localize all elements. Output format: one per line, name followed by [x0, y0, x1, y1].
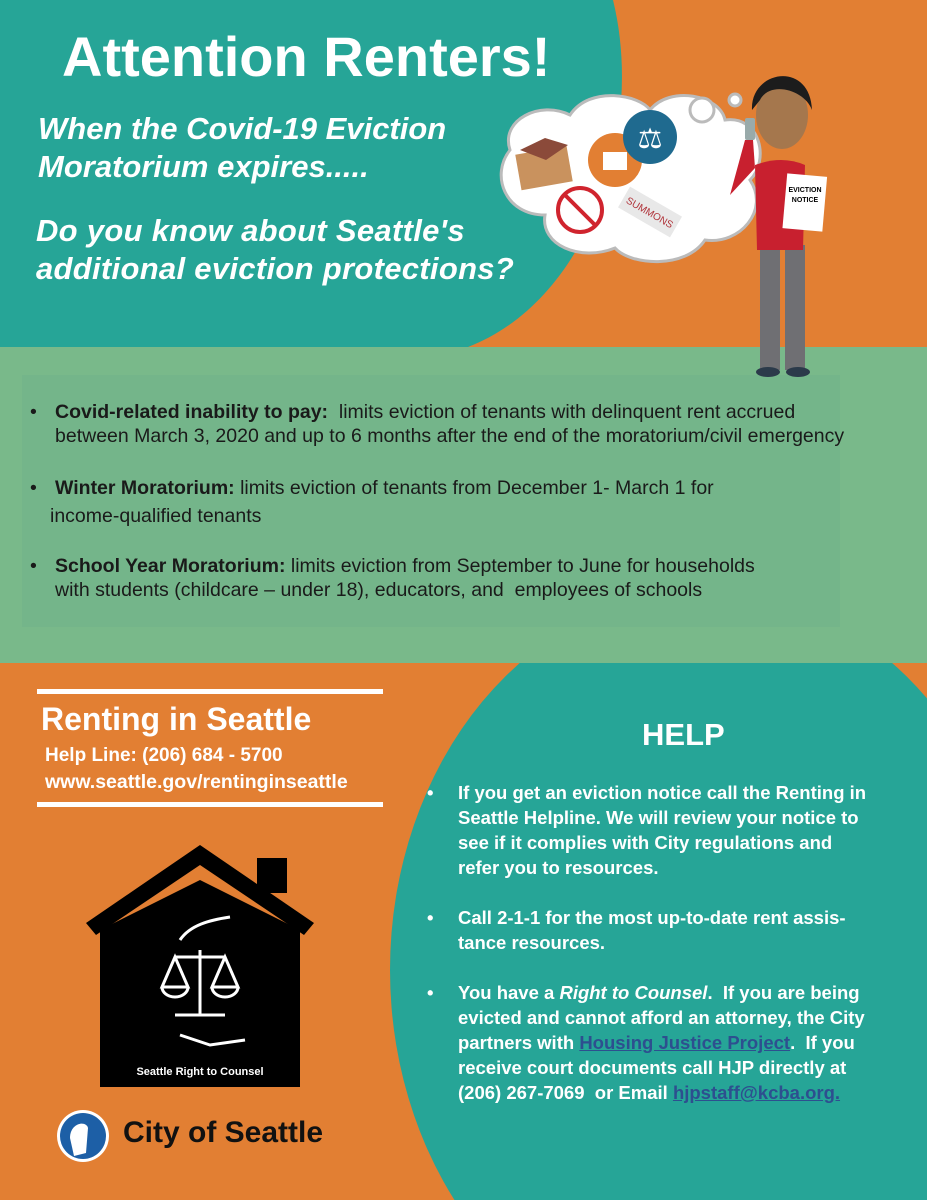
bullet 1: [30, 401, 844, 447]
subtitle: When the Covid-19 Eviction: [38, 111, 446, 146]
summons: [618, 187, 682, 237]
bullet 3: [30, 555, 755, 601]
envelope: [515, 146, 573, 190]
bullet 1: Covid-related inability to pay: limits eviction of tenants with delinquent rent accrued: [55, 401, 795, 423]
panel: Renting in Seattle: [37, 689, 383, 807]
thought bubble: SUMMONS: [624, 195, 675, 231]
illustration: thought bubble and person: [500, 76, 828, 377]
bullet 2: [30, 477, 714, 527]
bullet 1: •: [30, 401, 37, 423]
question: Do you know about Seattle's: [36, 213, 465, 248]
courthouse icon: [588, 133, 642, 187]
contact info: www.seattle.gov/rentinginseattle: [45, 771, 348, 793]
thought bubble: ⚖: [637, 123, 663, 154]
icon: Seattle Right to Counsel house: Seattle Right to Counsel: [136, 1066, 264, 1078]
person: EVICTION: [788, 187, 822, 194]
logo: City of Seattle: City of Seattle: [123, 1116, 323, 1149]
person: NOTICE: [792, 197, 819, 204]
person: [730, 76, 827, 377]
subtitle: [38, 111, 446, 184]
question: additional eviction protections?: [36, 251, 514, 286]
help bullet 3: •: [427, 982, 433, 1003]
scales icon: [623, 110, 677, 164]
bullet 3: •: [30, 555, 37, 577]
no sign: [558, 188, 602, 232]
bullet 3: with students (childcare – under 18), educators, and employees of schools: [55, 579, 702, 601]
subtitle: Moratorium expires.....: [38, 149, 369, 184]
help bullet 2: Call 2-1-1 for the most up-to-date rent assis-tance resources.: [458, 907, 846, 953]
contact info: Help Line: (206) 684 - 5700: [45, 745, 283, 766]
heading: HELP: HELP: [642, 717, 725, 752]
panel: help list: [427, 782, 866, 1103]
help bullet 3: You have a Right to Counsel. If you are being evicted and cannot afford an attorney, the City partners with Housing Justice Project. If you receive court documents call HJP directly at (206) 267-7069 or Email hjpstaff@kcba.org.: [458, 982, 865, 1103]
icon: Seattle Right to Counsel house: [86, 845, 314, 1087]
bullet 2: •: [30, 477, 37, 499]
question: [36, 213, 514, 286]
panel: protections list: [30, 401, 844, 601]
thought bubble: [501, 94, 760, 262]
help bullet 1: •: [427, 782, 433, 803]
title: Attention Renters!: [62, 25, 550, 88]
bullet 2: income-qualified tenants: [50, 505, 261, 527]
bullet 3: School Year Moratorium: limits eviction from September to June for households: [55, 555, 755, 577]
contact info: [45, 745, 348, 793]
bullet 1: between March 3, 2020 and up to 6 months after the end of the moratorium/civil emergency: [55, 425, 844, 447]
help bullet 2: •: [427, 907, 433, 928]
heading: Renting in Seattle: [41, 701, 311, 737]
help bullet 1: If you get an eviction notice call the Renting in Seattle Helpline. We will review your notice to see if it complies with City regulations and refer you to resources.: [458, 782, 866, 878]
bullet 2: Winter Moratorium: limits eviction of tenants from December 1- March 1 for: [55, 477, 714, 499]
logo: City of Seattle: [57, 1110, 323, 1162]
